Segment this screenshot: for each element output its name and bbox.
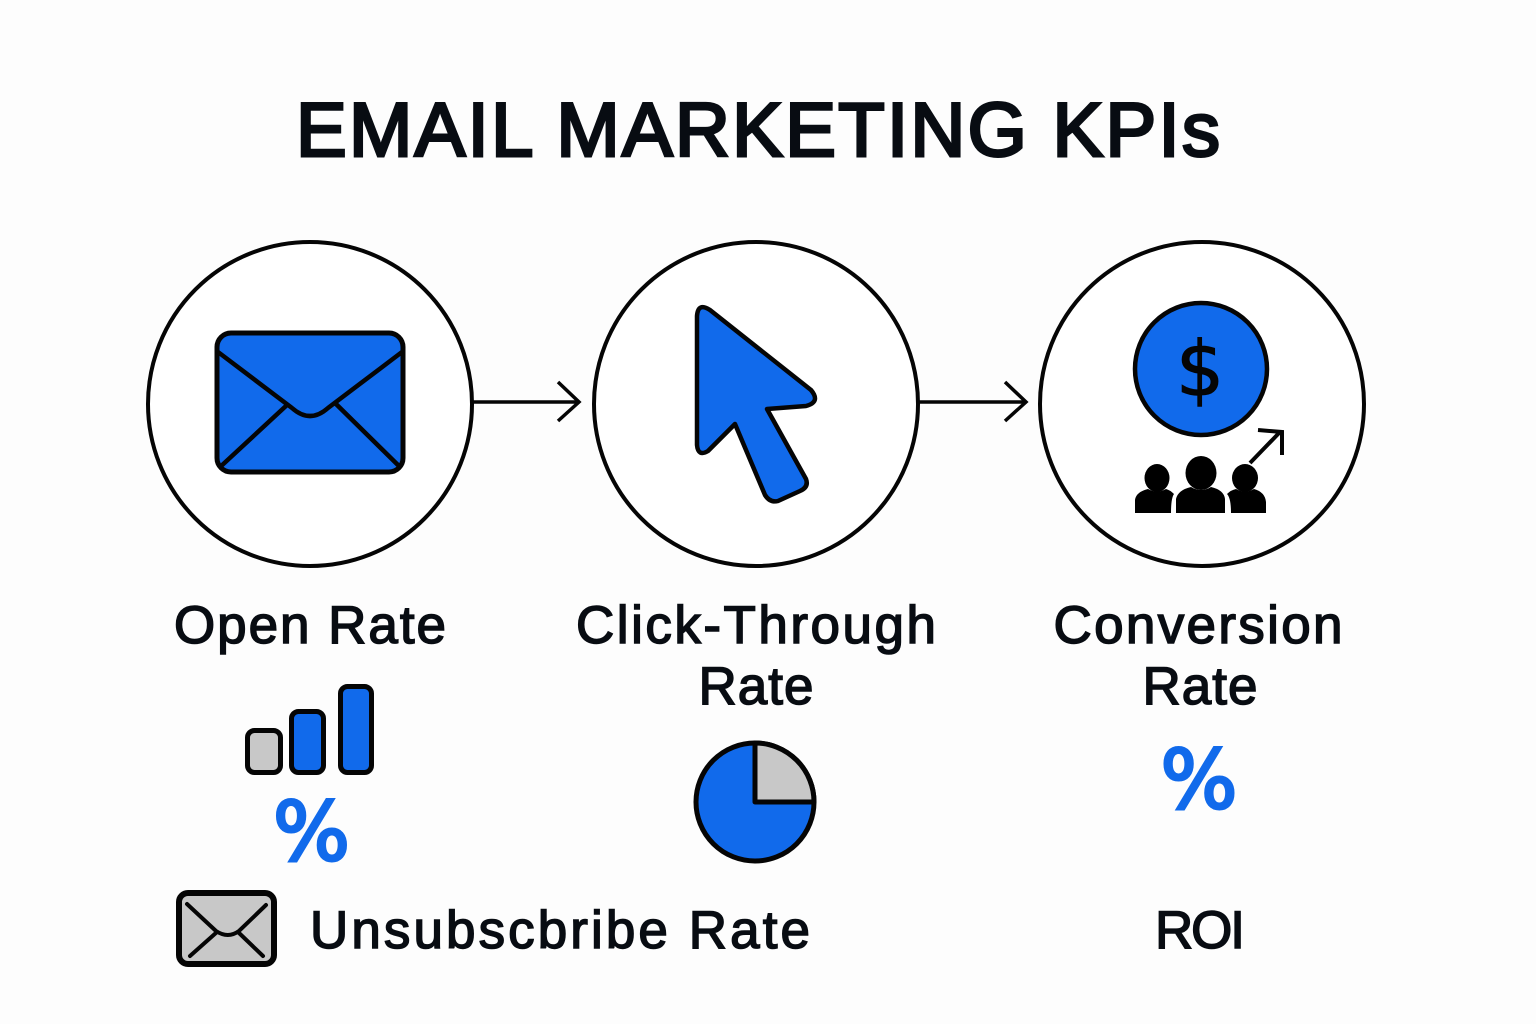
- icon: percent under conversion rate: %: [1161, 734, 1237, 828]
- label: click-through rate: [576, 596, 936, 716]
- icon: people group: [1135, 456, 1266, 513]
- icon: grey envelope: [179, 893, 274, 964]
- label: conversion rate: Conversion: [1054, 596, 1342, 655]
- panel: conversion circle with dollar and people icon: [1040, 242, 1364, 566]
- icon: dollar coin: $: [1176, 324, 1224, 413]
- icon: dollar coin: [1135, 303, 1267, 435]
- icon: bar chart: [248, 686, 372, 772]
- title: EMAIL MARKETING KPIs: [296, 88, 1220, 173]
- panel: click-through circle with cursor icon: [594, 242, 918, 566]
- icon: percent under open rate: %: [273, 786, 350, 880]
- label: click-through rate: Click-Through: [576, 596, 936, 655]
- label: open rate: Open Rate: [174, 596, 446, 655]
- label: conversion rate: [1054, 596, 1342, 716]
- label: ROI: ROI: [1155, 901, 1245, 960]
- icon: growth arrow: [1250, 430, 1282, 463]
- icon: pie chart: [696, 743, 814, 861]
- arrow: open rate to click-through: [473, 382, 579, 421]
- arrow: click-through to conversion: [919, 382, 1026, 421]
- label: click-through rate: Rate: [698, 657, 814, 716]
- label: conversion rate: Rate: [1142, 657, 1258, 716]
- panel: open rate circle with envelope icon: [148, 242, 472, 566]
- label: unsubscribe rate: Unsubscbribe Rate: [310, 901, 810, 960]
- icon: blue cursor: [697, 307, 815, 501]
- icon: blue envelope: [217, 333, 403, 472]
